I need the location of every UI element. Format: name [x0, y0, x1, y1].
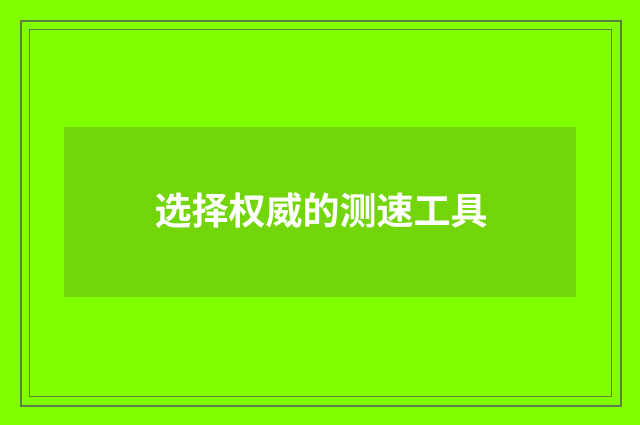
title: 选择权威的测速工具	[154, 191, 488, 232]
inner frame	[29, 29, 612, 397]
panel: title banner	[64, 127, 576, 297]
